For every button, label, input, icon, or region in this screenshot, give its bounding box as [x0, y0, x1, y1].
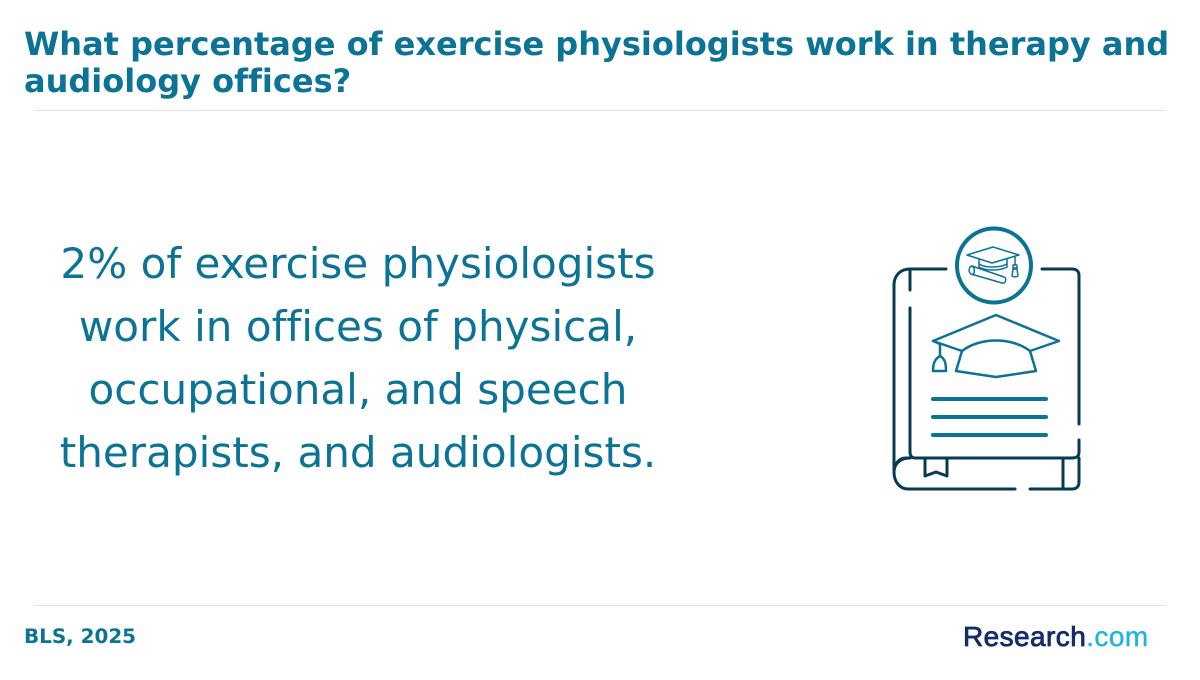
main statement text: work in offices of physical,: [79, 302, 637, 351]
icon: book with graduation cap: [892, 226, 1080, 490]
title: What percentage of exercise physiologists work in therapy and: [24, 25, 1169, 63]
main statement text: therapists, and audiologists.: [60, 428, 656, 477]
logo: Research.com: [963, 621, 1149, 652]
main statement text: occupational, and speech: [89, 365, 627, 414]
icon: book outline: [894, 269, 1079, 489]
main statement text: [60, 239, 656, 477]
icon: text lines: [933, 399, 1046, 435]
source: BLS, 2025: [24, 625, 136, 648]
icon: circle badge with small cap and diploma: [957, 228, 1031, 302]
main statement text: 2% of exercise physiologists: [60, 239, 656, 288]
icon: large graduation cap: [933, 315, 1059, 377]
title: [24, 25, 1169, 100]
title: audiology offices?: [24, 62, 351, 100]
